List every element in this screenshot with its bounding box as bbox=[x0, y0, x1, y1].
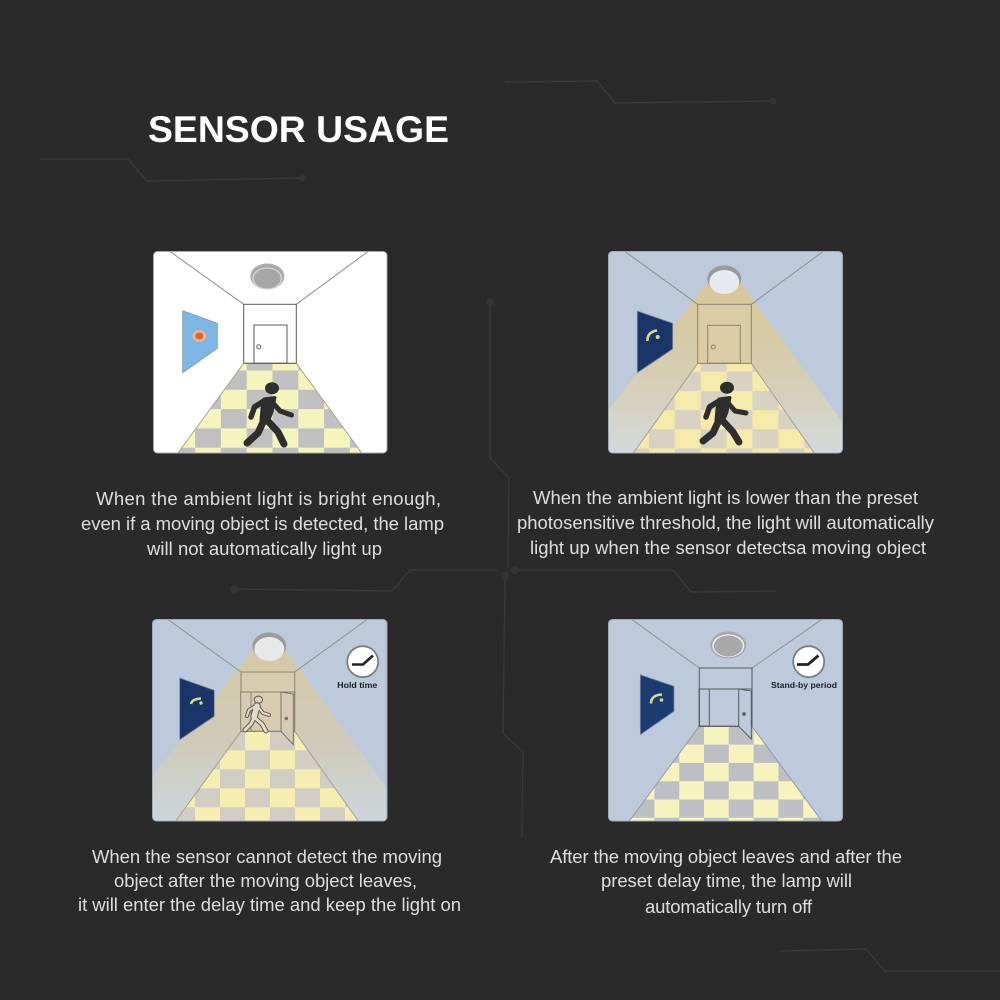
label: hold time: Hold time bbox=[337, 680, 378, 690]
panel: hold time bbox=[152, 620, 387, 821]
caption: bright ambient light: even if a moving object is detected, the lamp bbox=[81, 513, 444, 534]
icon: night window bbox=[180, 678, 214, 740]
panel border: low light with motion bbox=[608, 252, 842, 453]
panel: low light with motion bbox=[608, 252, 842, 453]
floor bbox=[178, 363, 362, 453]
floor bbox=[629, 726, 822, 821]
caption: hold time bbox=[78, 846, 461, 915]
panel: stand-by period bbox=[608, 620, 842, 821]
person walking bbox=[703, 382, 746, 442]
caption: bright ambient light: will not automatically light up bbox=[146, 538, 382, 559]
caption: low light with motion: light up when the sensor detectsa moving object bbox=[530, 537, 926, 558]
floor bbox=[176, 731, 358, 821]
ceiling lamp lit bbox=[252, 632, 286, 661]
panel: bright ambient light bbox=[154, 252, 387, 453]
icon: night window bbox=[637, 311, 673, 373]
corridor walls bbox=[625, 252, 823, 363]
title: SENSOR USAGE bbox=[148, 109, 449, 150]
corridor walls and open doors bbox=[168, 620, 367, 745]
caption: low light with motion: photosensitive threshold, the light will automatically bbox=[517, 512, 935, 533]
icon: daylight window bbox=[183, 311, 217, 373]
panel border: hold time bbox=[152, 620, 387, 821]
person outline leaving bbox=[245, 696, 269, 731]
ceiling lamp bbox=[250, 264, 284, 290]
caption: stand-by period: automatically turn off bbox=[645, 896, 813, 917]
panel border: bright ambient light bbox=[154, 252, 387, 453]
caption: bright ambient light bbox=[81, 488, 444, 559]
caption: low light with motion bbox=[517, 487, 935, 558]
caption: hold time: object after the moving object leaves, bbox=[114, 870, 417, 891]
panel border: stand-by period bbox=[608, 620, 842, 821]
ceiling lamp lit bbox=[707, 266, 741, 294]
icon: hold time clock bbox=[347, 646, 378, 677]
label: stand-by period: Stand-by period bbox=[771, 680, 837, 690]
caption: stand-by period: preset delay time, the lamp will bbox=[601, 870, 852, 891]
light cone bbox=[152, 650, 387, 821]
caption: hold time: it will enter the delay time and keep the light on bbox=[78, 894, 461, 915]
icon: stand-by clock bbox=[793, 646, 824, 677]
caption: bright ambient light: When the ambient light is bright enough, bbox=[96, 488, 441, 509]
floor bbox=[633, 363, 814, 453]
corridor walls and open doors bbox=[632, 620, 822, 739]
caption: stand-by period bbox=[550, 846, 902, 917]
ceiling lamp off bbox=[710, 632, 746, 658]
caption: low light with motion: When the ambient light is lower than the preset bbox=[533, 487, 918, 508]
person walking bbox=[247, 382, 292, 444]
caption: hold time: When the sensor cannot detect the moving bbox=[92, 846, 442, 867]
icon: night window bbox=[640, 675, 674, 735]
caption: stand-by period: After the moving object leaves and after the bbox=[550, 846, 902, 867]
corridor walls bbox=[170, 252, 368, 363]
light cone bbox=[608, 282, 842, 453]
